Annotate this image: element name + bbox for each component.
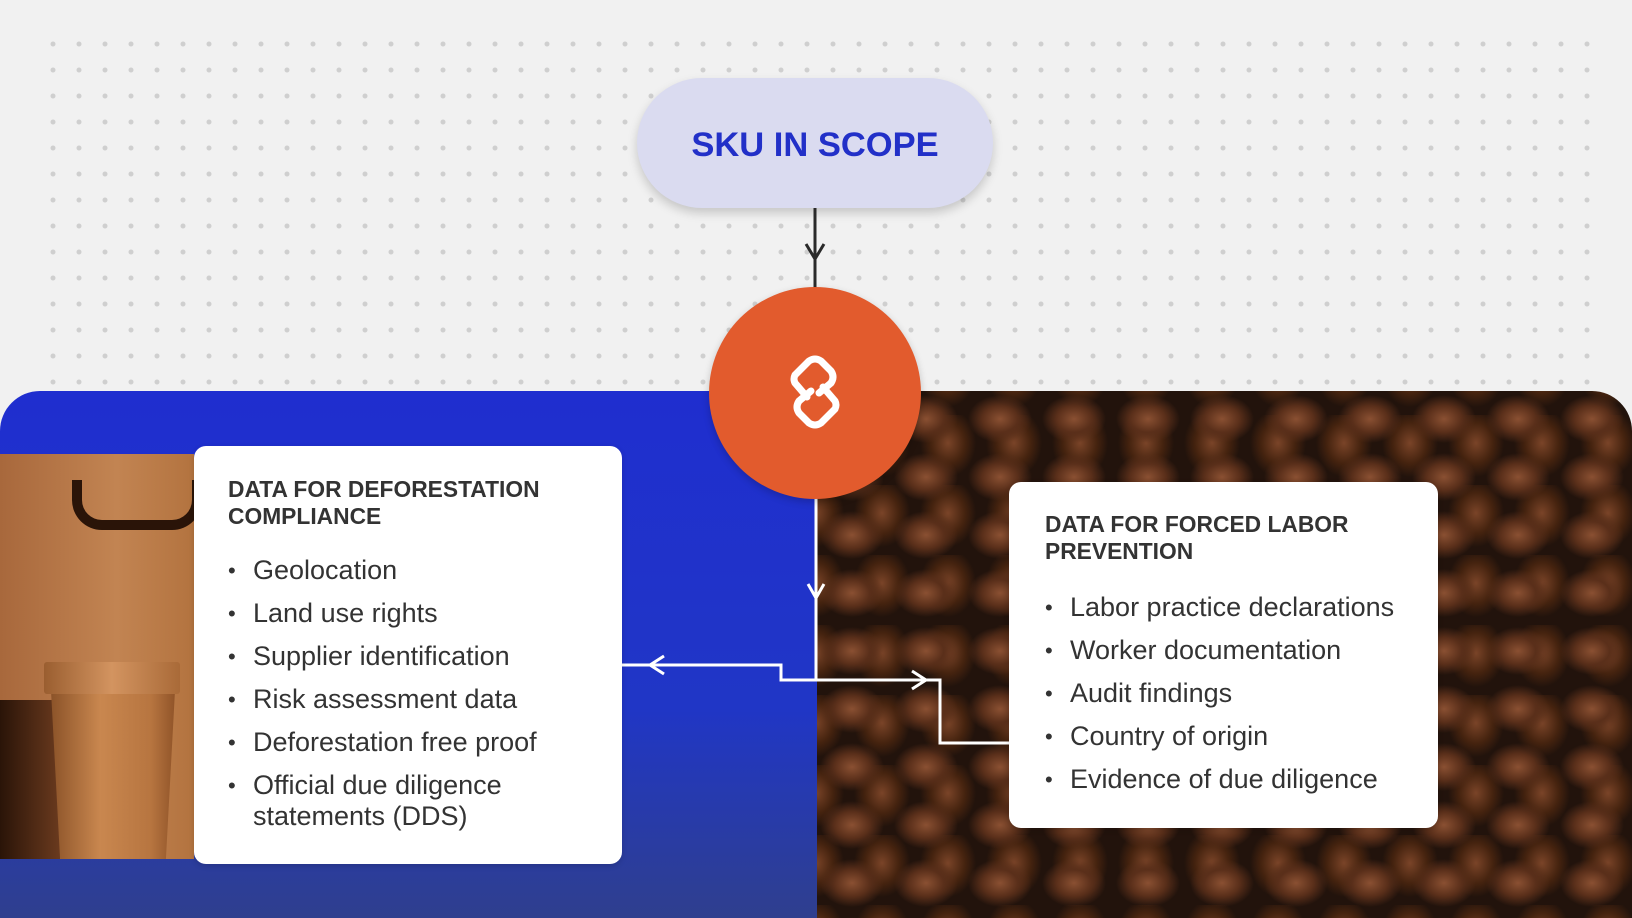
image: paper bag and cup [0, 454, 194, 859]
list: deforestation data: Deforestation free proof [253, 727, 537, 757]
list: deforestation data: Supplier identification [253, 641, 510, 671]
arrow: pill to logo [806, 208, 824, 290]
list: forced labor data: Audit findings [1070, 678, 1232, 708]
arrow: logo to branches [622, 495, 1010, 743]
list: deforestation data: Land use rights [253, 598, 438, 628]
list: deforestation data: Official due diligence [253, 770, 502, 800]
heading pill: SKU in scope [637, 78, 993, 208]
card title [228, 476, 540, 529]
list: forced labor data: Country of origin [1070, 721, 1268, 751]
card: forced labor prevention [1009, 482, 1438, 828]
list: forced labor data: Evidence of due diligence [1070, 764, 1378, 794]
list: forced labor data: Worker documentation [1070, 635, 1341, 665]
panel: blue left background [0, 391, 817, 918]
card title: COMPLIANCE [228, 503, 381, 529]
list: deforestation data: Risk assessment data [253, 684, 517, 714]
card: deforestation compliance [194, 446, 622, 864]
heading pill: SKU in scope: SKU IN SCOPE [691, 126, 939, 164]
list: deforestation data [228, 555, 537, 831]
icon: orange logo circle [709, 287, 921, 499]
card title: DATA FOR FORCED LABOR [1045, 511, 1349, 537]
panel: coffee beans background [817, 391, 1632, 918]
list: deforestation data: statements (DDS) [253, 801, 468, 831]
card title [1045, 511, 1349, 564]
list: forced labor data [1046, 592, 1394, 794]
list: forced labor data: Labor practice declarations [1070, 592, 1394, 622]
list: deforestation data: Geolocation [253, 555, 397, 585]
card title: DATA FOR DEFORESTATION [228, 476, 540, 502]
card title: PREVENTION [1045, 538, 1193, 564]
